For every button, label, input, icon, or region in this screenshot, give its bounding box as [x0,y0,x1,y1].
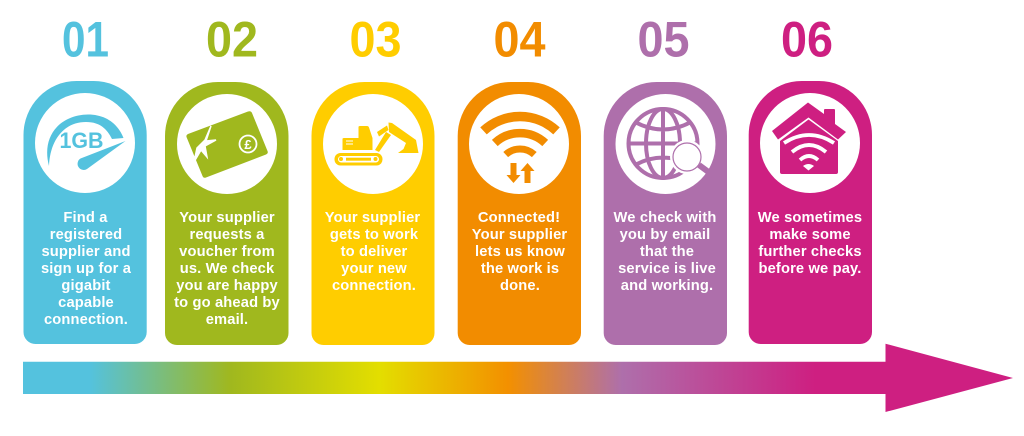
icon: 1GB speedometer [35,93,135,193]
icon: excavator [323,94,423,194]
panel: step 04 [458,82,581,345]
text: step 03: connection. [332,278,416,294]
text: step 02: to go ahead by [174,295,281,311]
panel: step 01 [24,81,147,344]
arrow: gradient timeline [23,344,1013,412]
text: step 04: Your supplier [472,227,567,243]
number 05: 05 [638,12,690,68]
text: step 06: make some [769,227,851,243]
text: step 01: supplier and [41,244,131,260]
icon: 1GB speedometer: 1GB [60,128,104,153]
text: step 02: us. We check [180,261,275,277]
text: step 02: requests a [190,227,265,243]
number 02: 02 [206,12,258,68]
text: step 05: that the [640,244,694,260]
step 01 [24,12,147,344]
step 05 [604,12,727,345]
text: step 02: Your supplier [179,210,275,226]
icon: globe and magnifier [616,94,718,194]
text: step 06: before we pay. [758,261,862,277]
panel: step 03 [312,82,434,345]
icon: house with wifi [760,93,860,193]
text: step 03: Your supplier [325,210,420,226]
text: step 01: capable [58,295,114,311]
number 06: 06 [781,12,833,68]
step 02 [165,12,288,345]
text: step 02: email. [206,312,248,328]
text: step 01: registered [50,227,122,243]
text: step 03: your new [341,261,407,277]
text: step 04: Connected! [478,210,560,226]
text: step 04: done. [500,278,540,294]
panel: step 05 [604,82,727,345]
text: step 04: lets us know [475,244,565,260]
text: step 06: We sometimes [758,210,862,226]
icon: voucher card [177,94,277,194]
text: step 05: and working. [621,278,713,294]
text: step 02: you are happy [176,278,278,294]
text: step 01: gigabit [61,278,111,294]
step 04 [458,12,581,345]
text: step 03: to deliver [341,244,408,260]
text: step 03: gets to work [330,227,419,243]
number 03: 03 [350,12,402,68]
number 01: 01 [62,12,109,68]
text: step 02: voucher from [179,244,275,260]
text: step 04: the work is [481,261,559,277]
icon: voucher card: £ [244,137,252,152]
panel: step 02 [165,82,288,345]
text: step 05: you by email [620,227,710,243]
text: step 05: service is live [618,261,716,277]
number 04: 04 [494,12,546,68]
text: step 01: sign up for a [41,261,132,277]
step 03 [312,12,434,345]
text: step 01: Find a [63,210,108,226]
panel: step 06 [749,81,872,344]
text: step 01: connection. [44,312,128,328]
text: step 06: further checks [758,244,862,260]
text: step 05: We check with [614,210,716,226]
icon: wifi with arrows [469,94,569,194]
step 06 [749,12,872,344]
